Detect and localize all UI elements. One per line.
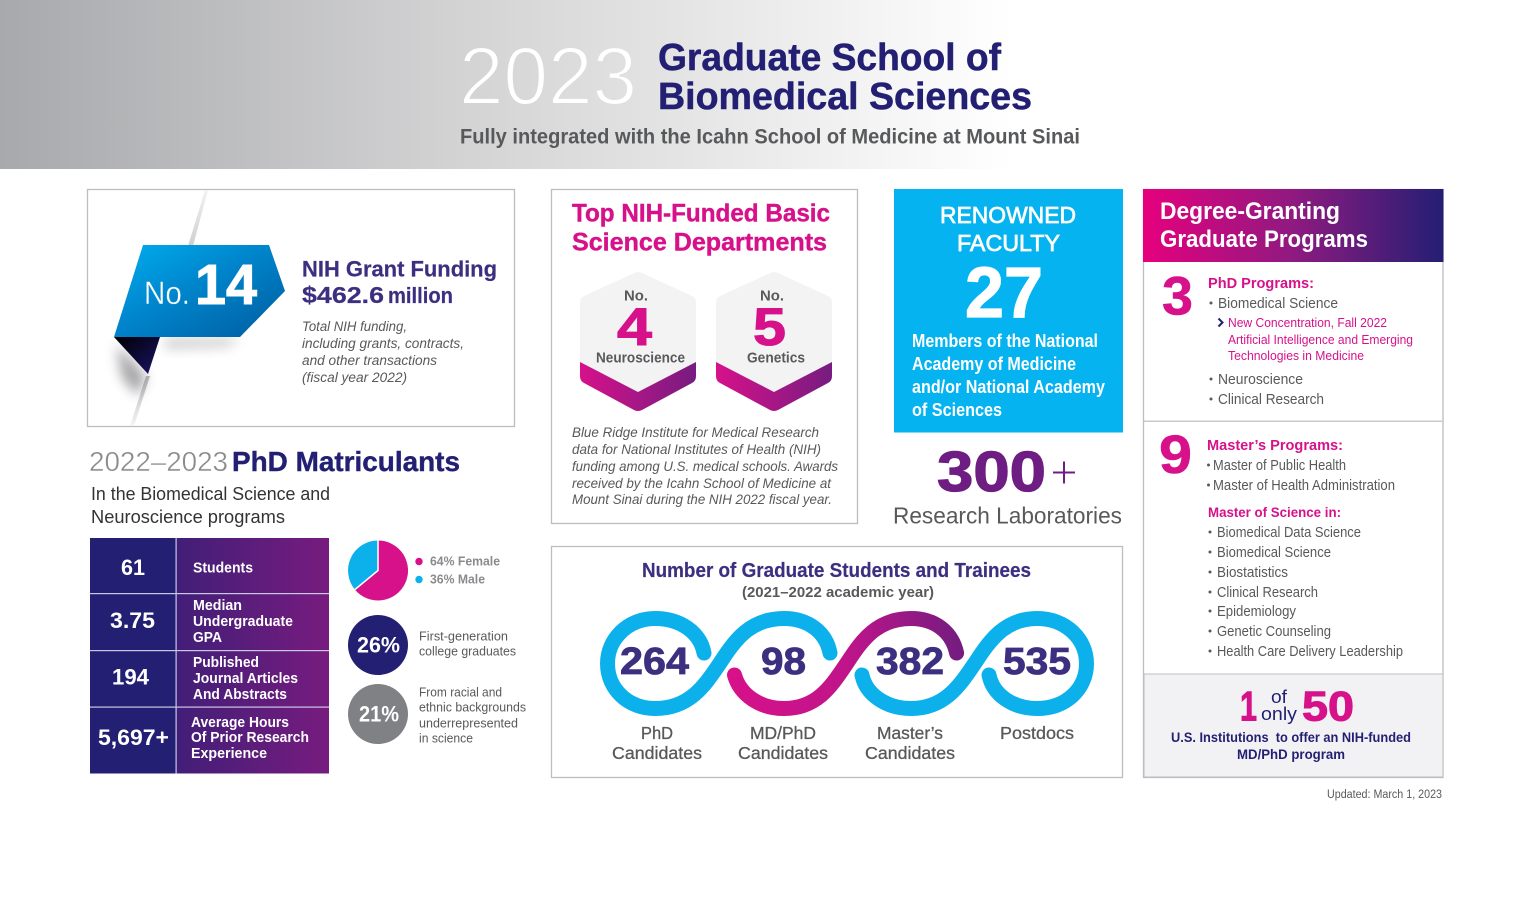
source note: Blue Ridge Institute for Medical Research (572, 424, 819, 440)
heading: PhD matriculants (89, 446, 460, 477)
funding note: and other transactions (302, 353, 437, 368)
section: PhD programs: Technologies in Medicine (1228, 348, 1364, 363)
panel: degree-granting programs (1143, 189, 1444, 778)
panel: renowned faculty (894, 189, 1123, 432)
count: postdocs: Postdocs (1000, 723, 1074, 743)
icon: ribbon badge: No. (144, 275, 190, 311)
section: PhD programs (1162, 266, 1413, 408)
funding note (302, 319, 464, 385)
section: PhD programs: 3 (1162, 266, 1193, 326)
callout: 1 of only 50: U.S. Institutions to offer an NIH-funded (1171, 729, 1411, 745)
section: master's programs: Biomedical Science (1217, 545, 1331, 561)
funding note: including grants, contracts, (302, 336, 464, 351)
section: PhD programs: Neuroscience (1218, 372, 1303, 388)
row: research hours (98, 715, 309, 762)
row: research hours: 5,697+ (98, 725, 169, 750)
section: PhD programs: Clinical Research (1218, 392, 1324, 408)
matriculants intro: Neuroscience programs (91, 506, 285, 527)
row: publications (112, 655, 298, 703)
count: PhD candidates: Candidates (612, 743, 702, 763)
title year: 2023 (459, 31, 637, 122)
title (658, 37, 1032, 118)
title: Graduate School of (658, 37, 1001, 79)
heading: PhD matriculants: 2022–2023 (89, 446, 228, 477)
panel: top NIH-funded departments (552, 190, 858, 524)
section: master's programs: Biomedical Data Science (1217, 525, 1361, 541)
section: master's programs: Biostatistics (1217, 565, 1288, 581)
funding note: (fiscal year 2022) (302, 370, 407, 385)
legend: gender (415, 554, 500, 586)
panel: renowned faculty: 27 (965, 254, 1043, 333)
subtitle: Fully integrated with the Icahn School of Medicine at Mount Sinai (460, 126, 1080, 148)
count: master's candidates: Candidates (865, 743, 955, 763)
stat: underrepresented (348, 684, 526, 746)
badge: neuroscience: Neuroscience (596, 350, 685, 366)
stat: first generation: college graduates (419, 644, 516, 658)
section: master's programs (1159, 425, 1403, 660)
row: research hours: Of Prior Research (191, 730, 309, 746)
badge: neuroscience: No. (624, 288, 648, 304)
row: students: 61 (121, 555, 145, 580)
stat: research laboratories (893, 440, 1122, 528)
table: matriculant stats (90, 538, 329, 774)
funding heading: million (388, 283, 453, 308)
badge: genetics: Genetics (747, 350, 805, 366)
section: master's programs: 9 (1159, 425, 1192, 485)
source note: data for National Institutes of Health (NIH) (572, 441, 821, 457)
icon: ribbon badge (114, 245, 285, 374)
section: PhD programs: New Concentration, Fall 2022 (1228, 315, 1387, 330)
count: PhD candidates: PhD (641, 723, 673, 743)
pie chart: gender (348, 540, 408, 601)
icon: ribbon badge: 14 (195, 253, 257, 317)
funding heading: NIH Grant Funding (302, 256, 497, 282)
panel heading: Number of Graduate Students and Trainees (642, 560, 1031, 582)
row: GPA: GPA (193, 630, 222, 646)
funding heading: $462.6 (302, 282, 384, 308)
count: master's candidates: Master’s (877, 723, 943, 743)
section: master's programs: Master’s Programs: (1207, 437, 1343, 454)
callout: 1 of only 50: 1 (1240, 682, 1257, 730)
count: MD/PhD candidates: 98 (761, 641, 806, 683)
section: PhD programs: Biomedical Science (1218, 296, 1338, 312)
header banner (0, 0, 1536, 169)
stat: underrepresented: in science (419, 732, 473, 746)
panel header: Degree-Granting (1160, 198, 1340, 225)
row: students: Students (193, 560, 253, 576)
source note (572, 424, 838, 507)
stat: research laboratories: Research Laboratories (893, 502, 1122, 528)
row: GPA: 3.75 (110, 608, 155, 633)
section: master's programs: Clinical Research (1217, 585, 1318, 601)
panel: NIH grant funding (88, 190, 514, 426)
panel: renowned faculty: and/or National Academy (912, 377, 1105, 397)
stat: underrepresented: ethnic backgrounds (419, 700, 526, 714)
source note: funding among U.S. medical schools. Awards (572, 458, 838, 474)
count: master's candidates (865, 641, 955, 763)
row: publications: Journal Articles (193, 671, 298, 687)
panel: renowned faculty: FACULTY (957, 230, 1060, 256)
stat: research laboratories: 300 (937, 440, 1046, 504)
panel: renowned faculty: Members of the National (912, 331, 1098, 351)
legend: gender: 36% Male (430, 572, 485, 586)
count: MD/PhD candidates: Candidates (738, 743, 828, 763)
update date: Updated: March 1, 2023 (1327, 789, 1442, 801)
section: PhD programs: PhD Programs: (1208, 275, 1314, 292)
row: students (121, 555, 253, 580)
funding note: Total NIH funding, (302, 319, 407, 334)
callout: 1 of only 50: 50 (1302, 682, 1354, 730)
callout: 1 of only 50: only (1261, 704, 1297, 724)
funding heading (302, 256, 497, 308)
heading: PhD matriculants: PhD Matriculants (232, 446, 460, 477)
chart: infinity wave (608, 618, 1086, 708)
panel: renowned faculty: RENOWNED (940, 202, 1076, 228)
section: master's programs: Genetic Counseling (1217, 624, 1331, 640)
panel heading: Science Departments (572, 228, 827, 256)
panel: graduate students and trainees (552, 546, 1122, 778)
source note: received by the Icahn School of Medicine at (572, 475, 832, 491)
matriculants intro (91, 483, 330, 527)
badge: genetics: 5 (753, 298, 786, 357)
panel: renowned faculty: of Sciences (912, 400, 1002, 420)
row: GPA: Undergraduate (193, 614, 293, 630)
stat: first generation (348, 615, 516, 675)
section: master's programs: Master of Public Health (1213, 458, 1346, 474)
stat: underrepresented: From racial and (419, 686, 502, 700)
callout: 1 of only 50 (1144, 674, 1443, 777)
callout: 1 of only 50: MD/PhD program (1237, 746, 1345, 762)
callout: 1 of only 50: of (1271, 687, 1288, 707)
section: master's programs: Master of Science in: (1208, 504, 1341, 520)
section: PhD programs: Artificial Intelligence and Emerging (1228, 332, 1413, 347)
panel: renowned faculty: Academy of Medicine (912, 354, 1076, 374)
panel header (1143, 189, 1444, 262)
row: GPA: Median (193, 598, 242, 614)
source note: Mount Sinai during the NIH 2022 fiscal year. (572, 491, 832, 507)
panel heading (572, 200, 830, 256)
stat: first generation: 26% (357, 632, 400, 658)
row: research hours: Average Hours (191, 715, 289, 731)
title: Biomedical Sciences (658, 76, 1032, 118)
row: publications: 194 (112, 664, 150, 690)
panel header: Graduate Programs (1160, 226, 1368, 253)
matriculants intro: In the Biomedical Science and (91, 483, 330, 504)
count: PhD candidates (612, 641, 702, 763)
count: MD/PhD candidates: MD/PhD (750, 723, 816, 743)
badge: genetics: No. (760, 288, 784, 304)
stat: underrepresented: underrepresented (419, 716, 518, 730)
row: GPA (110, 598, 293, 646)
row: publications: And Abstracts (193, 687, 287, 703)
section: master's programs: Master of Health Administration (1213, 478, 1395, 494)
panel heading: Top NIH-Funded Basic (572, 200, 830, 228)
row: research hours: Experience (191, 746, 267, 762)
stat: first generation: First-generation (419, 630, 508, 644)
badge: genetics (716, 272, 832, 411)
section: master's programs: Epidemiology (1217, 604, 1297, 620)
count: postdocs (1000, 641, 1074, 743)
count: MD/PhD candidates (738, 641, 828, 763)
stat: underrepresented: 21% (359, 702, 399, 726)
count: master's candidates: 382 (876, 641, 944, 683)
section: master's programs: Health Care Delivery Leadership (1217, 644, 1403, 660)
count: postdocs: 535 (1003, 641, 1071, 683)
count: PhD candidates: 264 (620, 641, 689, 683)
badge: neuroscience: 4 (617, 298, 653, 357)
row: publications: Published (193, 655, 259, 671)
panel subheading: (2021–2022 academic year) (742, 584, 934, 601)
legend: gender: 64% Female (430, 554, 500, 568)
badge: neuroscience (580, 272, 696, 411)
